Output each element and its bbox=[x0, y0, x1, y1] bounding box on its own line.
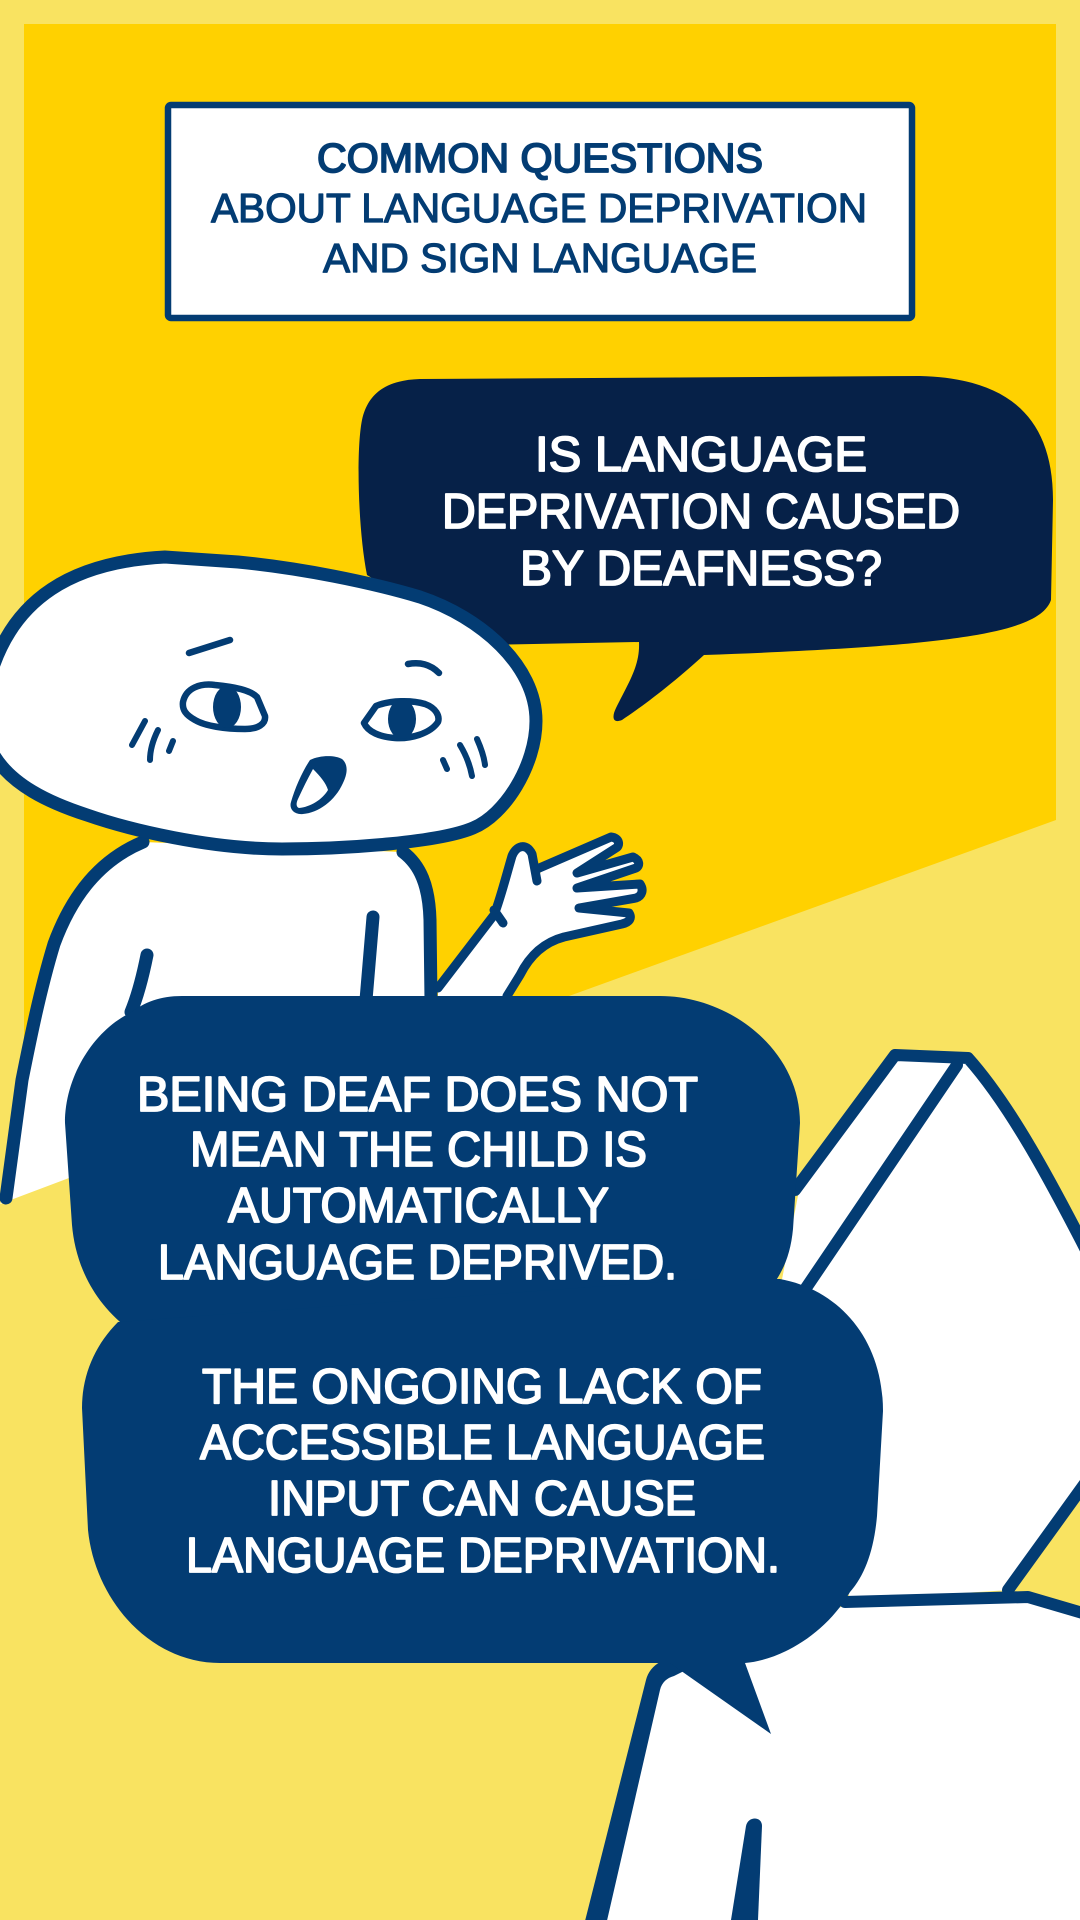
title box bbox=[168, 105, 912, 318]
speech bubble: question: DEPRIVATION CAUSED bbox=[442, 485, 960, 539]
lower body bbox=[593, 1593, 1080, 1920]
speech bubble: question: IS LANGUAGE bbox=[535, 428, 867, 482]
answer bubble: being deaf: BEING DEAF DOES NOT bbox=[137, 1068, 698, 1122]
title box: ABOUT LANGUAGE DEPRIVATION bbox=[211, 185, 867, 231]
head bbox=[0, 557, 536, 849]
answer bubble: lack of input: THE ONGOING LACK OF bbox=[202, 1360, 762, 1414]
answer bubble: being deaf bbox=[65, 996, 800, 1330]
answer bubble: lack of input: INPUT CAN CAUSE bbox=[268, 1472, 696, 1526]
answer bubble: being deaf: MEAN THE CHILD IS bbox=[190, 1123, 647, 1177]
answer bubble: lack of input bbox=[82, 1279, 883, 1734]
mouth bbox=[290, 756, 347, 814]
left eye bbox=[183, 685, 265, 729]
answer bubble: lack of input: ACCESSIBLE LANGUAGE bbox=[200, 1416, 765, 1470]
answer bubble: being deaf: AUTOMATICALLY bbox=[228, 1179, 609, 1233]
cheek marks bbox=[132, 721, 485, 776]
answer bubble: being deaf: LANGUAGE DEPRIVED. bbox=[158, 1236, 677, 1290]
character: left figure bbox=[0, 557, 642, 1204]
speech bubble: question: BY DEAFNESS? bbox=[520, 542, 882, 596]
speech bubble: question bbox=[359, 376, 1053, 721]
upper body / arm bbox=[780, 1055, 1080, 1600]
character: right figure bbox=[584, 1055, 1080, 1920]
title box: AND SIGN LANGUAGE bbox=[323, 235, 757, 281]
background panel: gold wedge bbox=[24, 24, 1056, 1193]
arm crease bbox=[731, 1818, 762, 1920]
body bbox=[0, 842, 432, 1204]
eyebrows bbox=[189, 640, 439, 673]
answer bubble: lack of input: LANGUAGE DEPRIVATION. bbox=[186, 1529, 780, 1583]
raised hand bbox=[438, 839, 642, 1000]
arm lines bbox=[131, 955, 147, 1012]
right eye bbox=[364, 701, 438, 738]
title box: COMMON QUESTIONS bbox=[317, 135, 763, 181]
